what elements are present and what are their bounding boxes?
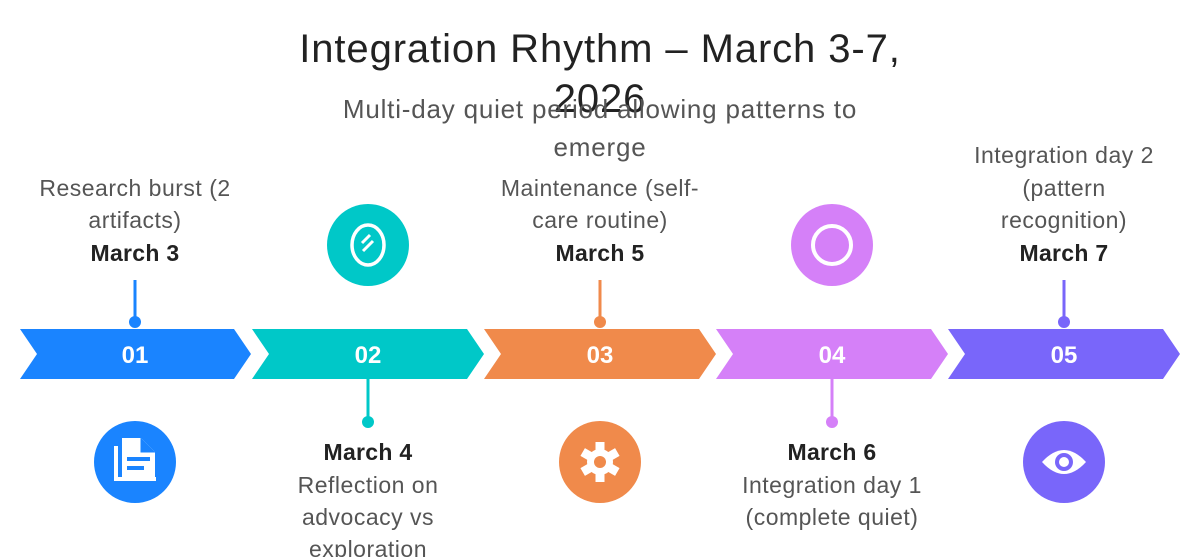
text 04: (complete quiet) [746,504,918,530]
step 05 [948,142,1180,503]
chevron 03 [484,329,716,379]
step 04 [716,204,948,530]
text 02: advocacy vs [302,504,434,530]
text 01 [39,175,231,266]
icon: eye [1023,421,1105,503]
text 04: Integration day 1 [742,472,922,498]
title [299,27,901,121]
text 05 [974,142,1154,266]
chevron 01 [20,329,251,379]
text 05: March 7 [1019,240,1109,266]
text 02 [298,439,438,557]
text 01: artifacts) [88,207,182,233]
step 01: 01 [122,342,148,369]
title: Integration Rhythm – March 3-7, [299,27,901,71]
step 05: 05 [1051,342,1077,369]
icon: circle [791,204,873,286]
chevron 05 [948,329,1180,379]
text 03: March 5 [555,240,645,266]
subtitle [343,94,857,162]
chevron 02 [252,329,484,379]
chevron 04 [716,329,948,379]
step 03: 03 [587,342,613,369]
text 01: Research burst (2 [39,175,231,201]
text 01: March 3 [90,240,180,266]
step 03 [484,175,716,503]
title: 2026 [554,77,646,121]
step 02 [252,204,484,557]
text 05: (pattern [1022,175,1106,201]
connector 03 [594,280,606,328]
text 03: care routine) [532,207,668,233]
icon: document [94,421,176,503]
connector 01 [129,280,141,328]
text 02: Reflection on [298,472,438,498]
icon: mirror [327,204,409,286]
connector 02 [362,379,374,428]
step 02: 02 [355,342,381,369]
icon: gear [559,421,641,503]
step 04: 04 [819,342,846,369]
text 02: March 4 [323,439,413,465]
subtitle: Multi-day quiet period allowing patterns to [343,94,857,124]
subtitle: emerge [554,132,646,162]
text 03: Maintenance (self- [501,175,699,201]
text 04: March 6 [787,439,877,465]
connector 05 [1058,280,1070,328]
step 01 [20,175,251,503]
connector 04 [826,379,838,428]
text 03 [501,175,699,266]
text 05: recognition) [1001,207,1127,233]
text 05: Integration day 2 [974,142,1154,168]
text 04 [742,439,922,530]
